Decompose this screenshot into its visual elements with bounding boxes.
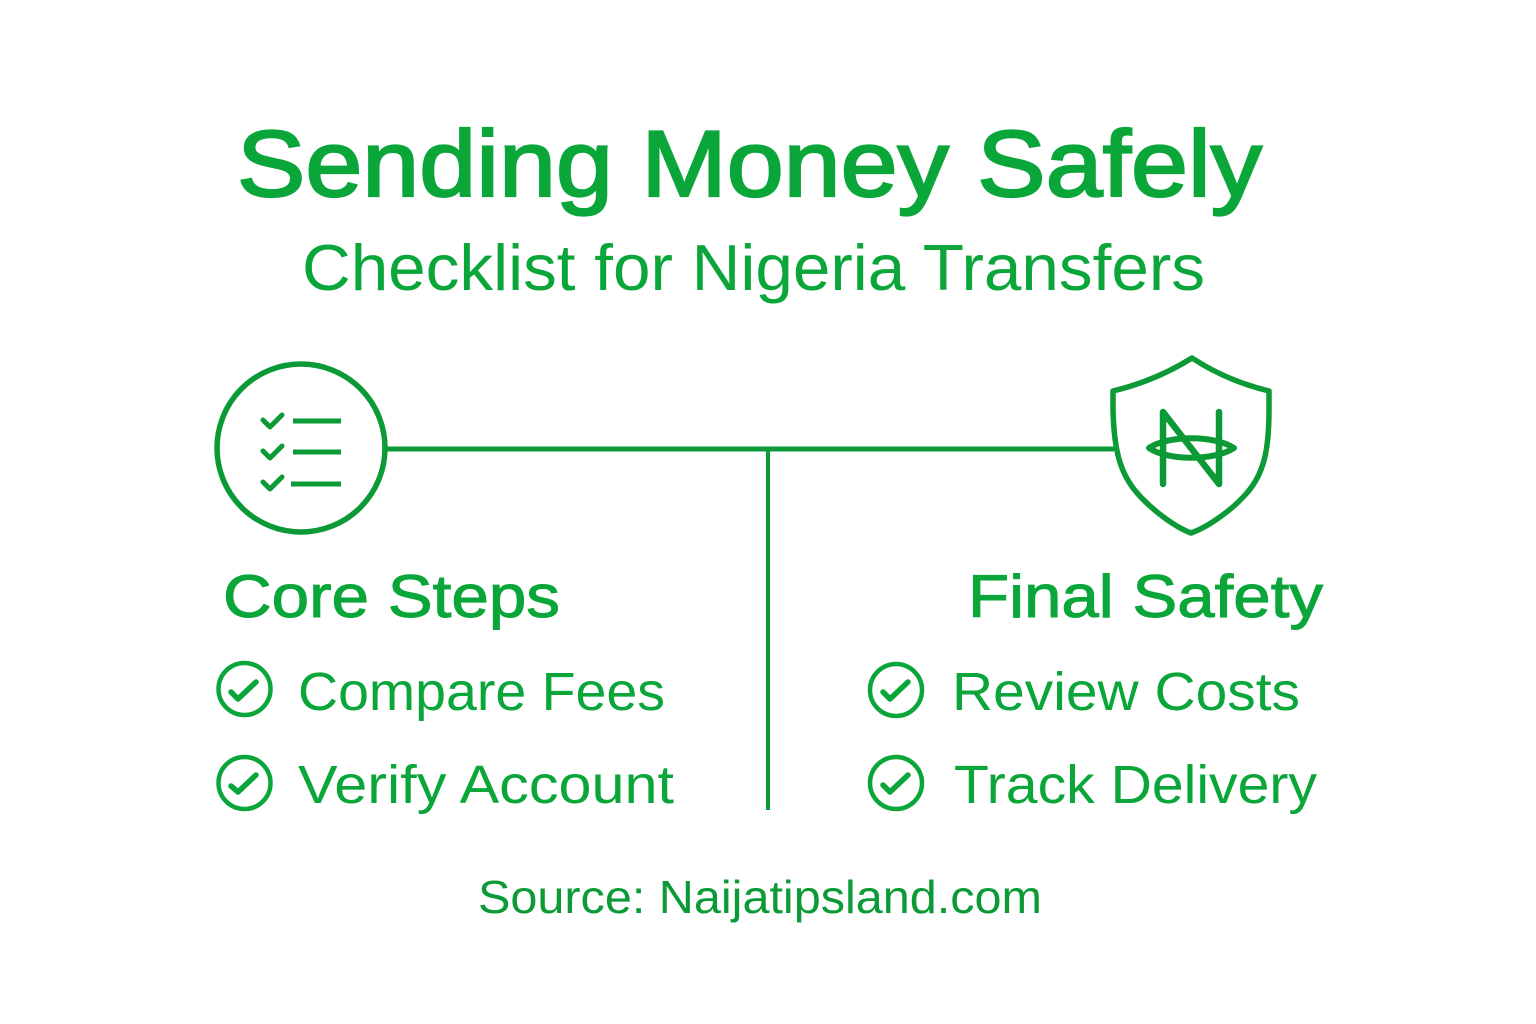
heading: final safety: Final Safety [968, 563, 1323, 630]
icon: check track delivery [870, 757, 922, 809]
item: compare fees: Compare Fees [298, 662, 665, 722]
heading: core steps: Core Steps [223, 563, 560, 630]
icon: checklist in circle [217, 364, 385, 532]
icon: check review costs [870, 664, 922, 716]
item: track delivery: Track Delivery [954, 755, 1317, 815]
item: review costs: Review Costs [952, 662, 1300, 722]
panel: core steps [218, 563, 674, 815]
subtitle: Checklist for Nigeria Transfers [302, 231, 1205, 304]
connector lines [386, 449, 1114, 810]
item: verify account: Verify Account [298, 755, 674, 815]
icon: shield with naira sign [1113, 358, 1269, 533]
title: Sending Money Safely [237, 111, 1262, 216]
icon: check compare fees [218, 663, 270, 715]
source line: Source: Naijatipsland.com [478, 871, 1042, 923]
icon: check verify account [218, 757, 270, 809]
panel: final safety [870, 563, 1323, 815]
